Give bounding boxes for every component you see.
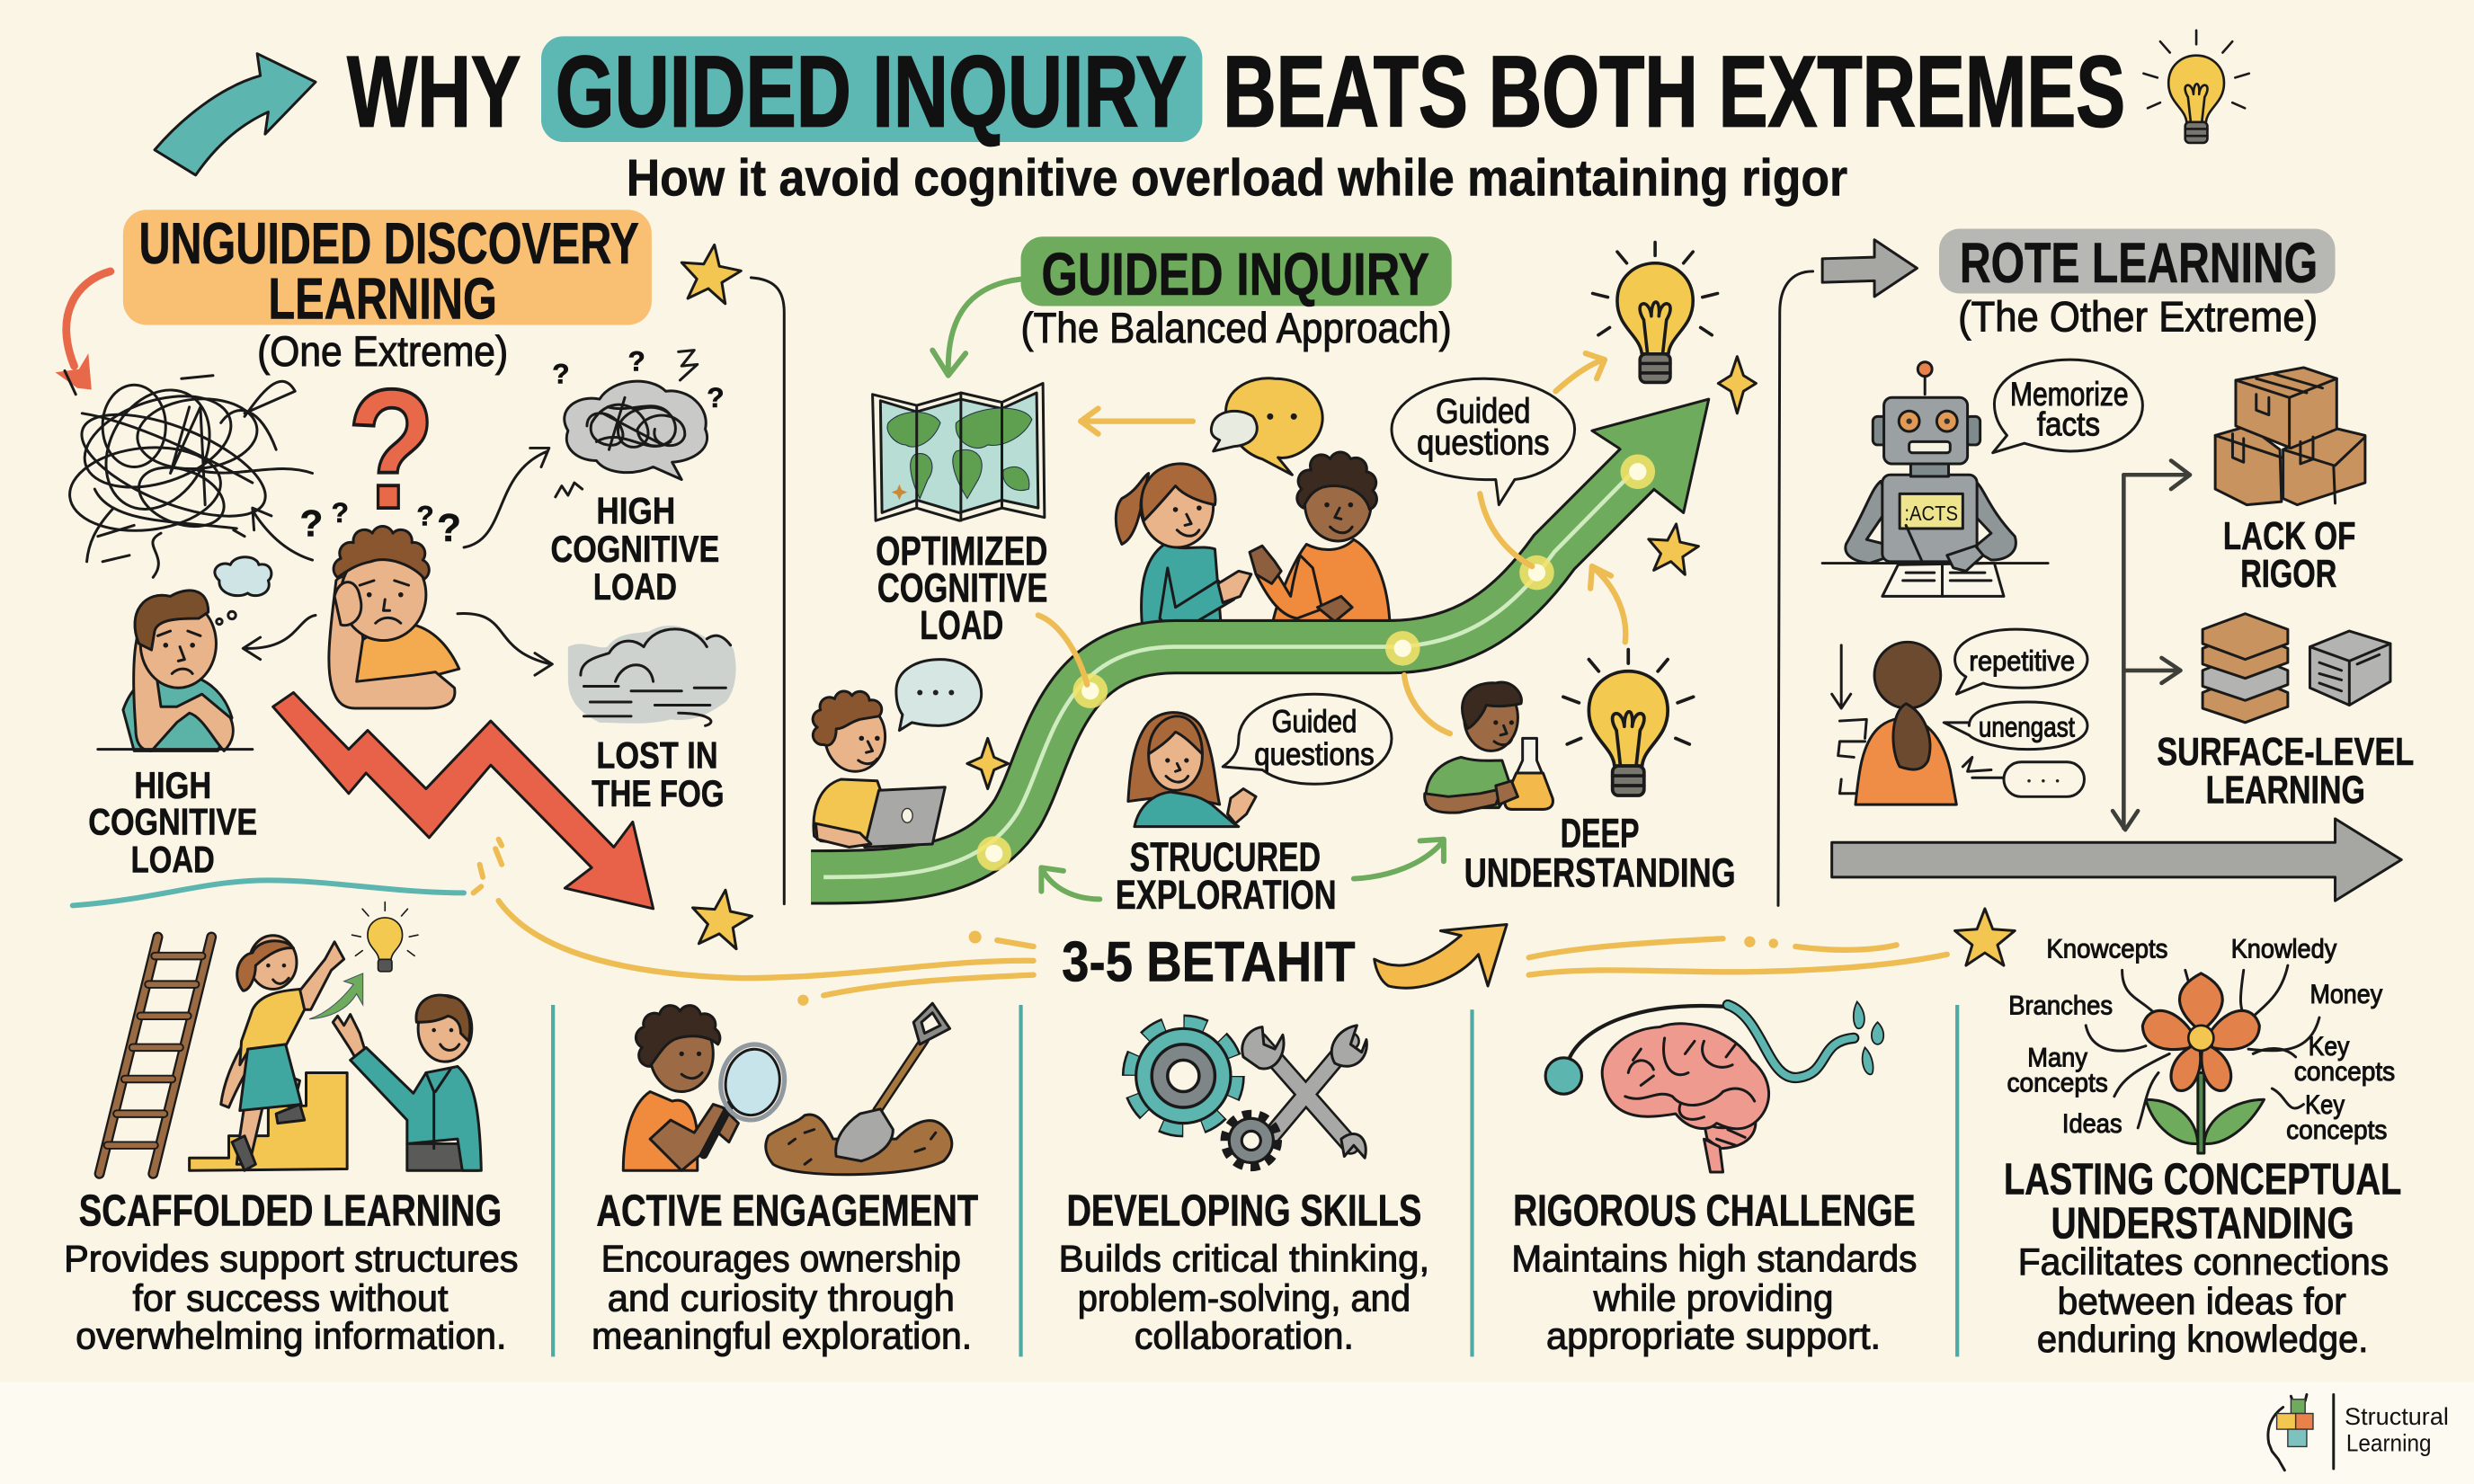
figure: robot: :ACTS: [1904, 502, 1958, 525]
figure: confused student centre: [329, 526, 459, 708]
labels: flower concepts: [2007, 934, 2395, 1145]
path glow markers: [976, 454, 1655, 871]
text: scaffolded learning body: [64, 1238, 519, 1357]
icon: yellow arrow: [1375, 924, 1507, 988]
text: lasting understanding body: Facilitates connections: [2018, 1240, 2389, 1283]
icon: grey speech bubble: [896, 660, 982, 731]
callout: guided questions lower: Guided: [1272, 704, 1357, 739]
label: structured exploration: [1116, 834, 1337, 918]
heading: unguided discovery: LEARNING: [268, 266, 497, 332]
small question marks: ?: [552, 357, 570, 389]
icon: teal droplets: [1854, 1001, 1883, 1074]
icon: small light bulb: [352, 902, 418, 972]
label: optimized cognitive load: OPTIMIZED: [876, 528, 1047, 573]
heading: guided inquiry: (The Balanced Approach): [1021, 305, 1452, 352]
icon: grey header arrow: [1822, 240, 1917, 297]
heading: unguided discovery: [123, 209, 652, 376]
icon: red zigzag falling arrow: [273, 692, 654, 909]
icon: large teal gear: [1131, 1024, 1235, 1128]
callout: unengast: unengast: [1979, 711, 2075, 743]
text: rigorous challenge body: [1511, 1238, 1917, 1357]
icon: cardboard boxes: [2215, 368, 2365, 505]
labels: flower concepts: Knowledy: [2231, 934, 2336, 964]
callout: repetitive: [1955, 629, 2087, 694]
labels: flower concepts: Many: [2027, 1043, 2087, 1072]
label: lack of rigor: LACK OF: [2223, 514, 2355, 558]
text: lasting understanding body: enduring knowledge.: [2037, 1318, 2368, 1360]
column divider: [1019, 1005, 1022, 1356]
icon: light bulb top: [1593, 243, 1718, 382]
text: lasting understanding body: [2018, 1240, 2389, 1360]
column divider: [552, 1005, 554, 1356]
label: lost in the fog: [592, 734, 725, 814]
logo: structural learning: Learning: [2346, 1429, 2432, 1457]
labels: flower concepts: Ideas: [2062, 1109, 2122, 1139]
figure: student with laptop: [813, 691, 945, 847]
labels: flower concepts: concepts: [2286, 1115, 2387, 1145]
callout: memorize facts: Memorize: [2010, 376, 2129, 413]
labels: flower concepts: Money: [2309, 980, 2382, 1009]
label: high cognitive load right: [551, 490, 719, 608]
labels: flower concepts: concepts: [2007, 1069, 2108, 1098]
label: deep understanding: DEEP: [1561, 810, 1640, 856]
icon: crossed wrenches: [1242, 1026, 1366, 1158]
text: rigorous challenge body: appropriate support.: [1546, 1315, 1881, 1357]
title: BEATS BOTH EXTREMES: [1223, 34, 2125, 147]
heading: rote learning: [1939, 228, 2336, 342]
heading: unguided discovery: (One Extreme): [257, 328, 508, 376]
label: optimized cognitive load: [876, 528, 1047, 648]
panel: active engagement: [592, 1003, 978, 1357]
small question marks: [299, 344, 725, 550]
text: scaffolded learning body: overwhelming information.: [76, 1315, 506, 1357]
figure: girl with guided questions: [1128, 713, 1256, 827]
small question marks: ?: [416, 499, 434, 531]
logo: structural learning: Structural: [2345, 1402, 2449, 1430]
icon: concept flower: [2086, 965, 2319, 1153]
label: high cognitive load right: COGNITIVE: [551, 528, 719, 570]
icon: fog cloud: [568, 626, 736, 725]
text: lasting understanding body: between ideas for: [2058, 1280, 2346, 1322]
icon: stairs: [190, 1072, 347, 1170]
label: high cognitive load right: LOAD: [593, 565, 677, 608]
icon: world map: [873, 383, 1045, 520]
text: rigorous challenge body: while providing: [1593, 1276, 1833, 1319]
small question marks: ?: [299, 502, 323, 545]
panel: lasting conceptual understanding: [2004, 934, 2401, 1360]
figure: girl climbing: [221, 936, 344, 1170]
callout: guided questions lower: [1223, 694, 1392, 784]
icon: arc and teal ball: [1545, 1005, 1854, 1094]
icon: star: [1955, 909, 2015, 965]
text: developing skills body: problem-solving, and: [1078, 1276, 1411, 1319]
yellow swooshes: [499, 901, 1947, 995]
labels: flower concepts: Key: [2309, 1032, 2349, 1062]
small question marks: ?: [707, 381, 725, 413]
title: [347, 34, 2125, 147]
labels: flower concepts: Key: [2305, 1090, 2345, 1120]
callout: guided questions upper: questions: [1417, 423, 1550, 462]
callout: guided questions upper: Guided: [1436, 392, 1530, 431]
label: structured exploration: STRUCURED: [1130, 834, 1321, 880]
title: GUIDED INQUIRY: [556, 34, 1187, 147]
figure: boy with magnifier: [623, 1006, 790, 1170]
text: developing skills body: collaboration.: [1135, 1315, 1354, 1357]
labels: flower concepts: Knowcepts: [2046, 934, 2167, 964]
callout: unengast: [1944, 702, 2087, 750]
icon: tangled scribble: [65, 370, 313, 577]
heading: rote learning: ROTE LEARNING: [1960, 232, 2318, 295]
label: structured exploration: EXPLORATION: [1116, 872, 1337, 918]
text: rigorous challenge body: Maintains high standards: [1511, 1238, 1917, 1280]
yellow connector arrows: [1038, 353, 1625, 733]
connector arrows: [2113, 460, 2190, 830]
figure: worried student left: [98, 591, 253, 751]
text: scaffolded learning body: Provides support structures: [64, 1238, 519, 1280]
panel: unguided discovery learning: [55, 209, 736, 909]
icon: ladder: [100, 937, 211, 1174]
label: deep understanding: [1464, 810, 1736, 895]
heading: rote learning: (The Other Extreme): [1958, 294, 2318, 342]
text: active engagement body: Encourages ownership: [601, 1238, 961, 1280]
text: developing skills body: Builds critical thinking,: [1059, 1238, 1429, 1280]
figure: student with flask: [1425, 682, 1553, 813]
heading: developing skills: DEVELOPING SKILLS: [1066, 1187, 1421, 1236]
figure: teacher: [333, 995, 481, 1170]
heading: guided inquiry: [1021, 236, 1452, 352]
icon: small thought cloud: [215, 557, 271, 625]
small question marks: ?: [628, 344, 645, 377]
text: developing skills body: [1059, 1238, 1429, 1357]
icon: tangled brain cloud: [565, 381, 707, 480]
heading: lasting conceptual understanding: UNDERSTANDING: [2051, 1200, 2354, 1249]
label: lack of rigor: [2223, 514, 2355, 596]
decorative band with 3-5 label: [73, 840, 1947, 1006]
label: surface-level learning: [2157, 730, 2414, 812]
logo: structural learning: [2268, 1394, 2449, 1471]
text: active engagement body: [592, 1238, 972, 1357]
icon: sparkle: [967, 738, 1009, 789]
icon: sparkle right: [1718, 357, 1756, 413]
icon: small grey gear: [1226, 1115, 1277, 1166]
callout: ellipsis: [1962, 757, 2084, 796]
figure: robot: [1822, 362, 2048, 596]
heading: active engagement: ACTIVE ENGAGEMENT: [596, 1187, 978, 1236]
column divider: [1956, 1005, 1958, 1356]
panel: scaffolded learning: [64, 902, 519, 1357]
divider: right panel: [1778, 271, 1813, 905]
figure: girl from behind: [1832, 642, 1956, 804]
label: high cognitive load left: [88, 764, 257, 881]
labels: flower concepts: concepts: [2294, 1057, 2395, 1087]
heading: scaffolded learning: SCAFFOLDED LEARNING: [79, 1187, 502, 1236]
teal wavy line: [73, 880, 464, 905]
arrows from centre student: [243, 448, 552, 675]
small question marks: ?: [437, 506, 461, 550]
icon: star mid: [1644, 520, 1701, 576]
text: active engagement body: and curiosity through: [608, 1276, 955, 1319]
icon: teal curved arrow: [155, 54, 316, 175]
callout: memorize facts: facts: [2037, 405, 2100, 442]
label: high cognitive load right: HIGH: [596, 490, 675, 532]
icon: title light bulb: [2143, 31, 2249, 143]
icon: shovel in dirt: [766, 1003, 952, 1175]
arrow: heading to map: [932, 280, 1021, 376]
heading: rigorous challenge: RIGOROUS CHALLENGE: [1513, 1187, 1916, 1236]
label: high cognitive load left: COGNITIVE: [88, 800, 257, 842]
label: deep understanding: UNDERSTANDING: [1464, 849, 1736, 895]
icon: speech bubbles: [1211, 378, 1322, 475]
icon: big grey arrow: [1832, 819, 2401, 901]
chart: green rising path with arrow: [811, 399, 1709, 877]
label: high cognitive load left: LOAD: [131, 839, 215, 881]
label: optimized cognitive load: COGNITIVE: [877, 565, 1047, 611]
title: WHY: [347, 34, 521, 147]
arrow: bubbles to map: [1081, 409, 1193, 434]
subtitle: How it avoid cognitive overload while maintaining rigor: [627, 150, 1847, 208]
icon: small green arrow: [309, 973, 363, 1019]
label: high cognitive load left: HIGH: [134, 764, 211, 806]
text: scaffolded learning body: for success without: [132, 1276, 449, 1319]
callout: repetitive: repetitive: [1969, 644, 2075, 677]
panel: guided inquiry: [811, 236, 1756, 918]
label: lost in the fog: LOST IN: [596, 734, 718, 777]
panel: rote learning: [1822, 228, 2414, 901]
panel: developing skills: [1059, 1024, 1429, 1357]
callout: guided questions lower: questions: [1254, 737, 1375, 772]
icon: big question mark: ?: [347, 354, 435, 545]
label: lost in the fog: THE FOG: [592, 772, 725, 814]
column divider: [1471, 1009, 1473, 1356]
small question marks: ?: [332, 496, 349, 529]
icon: brain: [1602, 1024, 1769, 1172]
icon: layered stack: [2203, 614, 2288, 723]
star: [688, 886, 755, 950]
heading: guided inquiry: GUIDED INQUIRY: [1041, 242, 1429, 308]
callout: guided questions upper: [1392, 378, 1575, 505]
divider: left panel: [751, 278, 784, 904]
heading: lasting conceptual understanding: [2004, 1156, 2401, 1249]
label: 3-5 betahit: 3-5 BETAHIT: [1062, 931, 1356, 994]
heading: unguided discovery: UNGUIDED DISCOVERY: [138, 210, 639, 276]
icon: coral curved arrow: [55, 271, 111, 390]
text: active engagement body: meaningful exploration.: [592, 1315, 972, 1357]
labels: flower concepts: Branches: [2008, 991, 2113, 1021]
icon: grey cube: [2309, 631, 2390, 706]
label: lack of rigor: RIGOR: [2240, 552, 2336, 596]
green arrows: [1041, 840, 1444, 899]
icon: light bulb lower: [1563, 650, 1694, 795]
figure: two students talking: [1116, 452, 1390, 635]
label: surface-level learning: LEARNING: [2206, 768, 2365, 812]
star: [677, 241, 744, 306]
label: optimized cognitive load: LOAD: [920, 602, 1003, 648]
callout: memorize facts: [1993, 360, 2142, 453]
panel: rigorous challenge: [1511, 1001, 1917, 1357]
